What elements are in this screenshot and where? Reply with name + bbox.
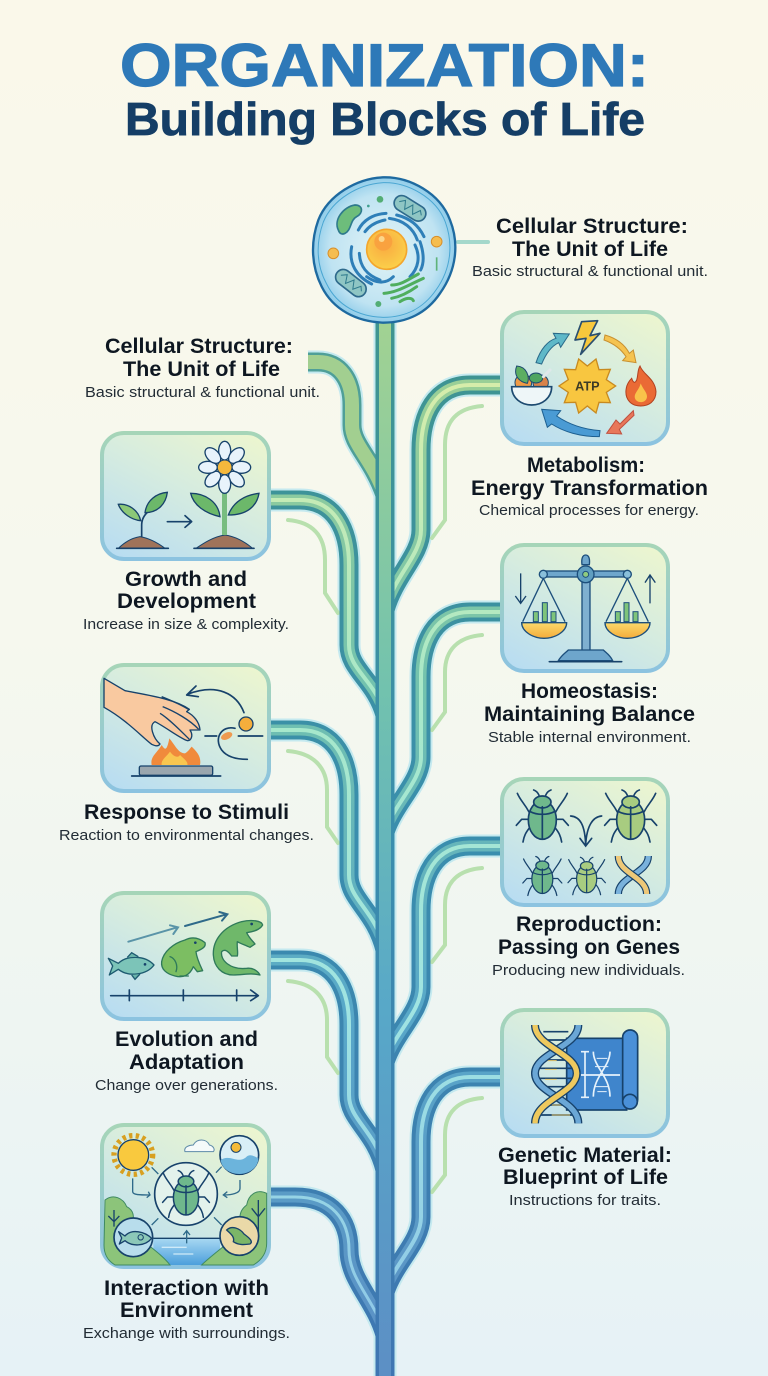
heading: Metabolism: [527, 454, 645, 477]
heading [104, 1277, 269, 1322]
panel: metabolism [471, 312, 708, 519]
panel: cellular structure label (right): Basic structural & functional unit. [472, 264, 708, 280]
heading: Adaptation [129, 1051, 244, 1074]
description: Chemical processes for energy. [479, 503, 699, 519]
icon: energy cycle with ATP: ATP [575, 380, 600, 394]
branch: reproduction [385, 846, 503, 1062]
heading: Evolution and [115, 1028, 258, 1051]
icon: DNA and blueprint [535, 1025, 638, 1123]
connector: cell to label [458, 240, 488, 244]
heading: Development [117, 590, 256, 613]
icon: hand near flame [104, 678, 263, 776]
branch: genetic material [385, 1077, 503, 1292]
heading: Growth and [125, 568, 247, 591]
panel: cellular structure label (left): Cellular Structure: [105, 335, 293, 358]
thin side shoots [288, 406, 482, 1192]
icon: cell [313, 177, 455, 323]
panel: genetic material [498, 1010, 672, 1209]
heading [498, 1144, 672, 1189]
description: Reaction to environmental changes. [59, 828, 314, 844]
icon: balance scale [515, 555, 655, 662]
heading: Blueprint of Life [503, 1166, 668, 1189]
panel: response to stimuli [59, 665, 314, 844]
heading: Maintaining Balance [484, 703, 695, 726]
heading [117, 568, 256, 613]
heading [115, 1028, 258, 1074]
panel: interaction with environment [83, 1125, 290, 1342]
heading [484, 680, 695, 726]
branch: evolution [268, 960, 385, 1170]
panel: cellular structure label (right): The Unit of Life [512, 238, 668, 261]
description: Increase in size & complexity. [83, 617, 289, 633]
branch: homeostasis [385, 612, 503, 832]
panel: growth and development [83, 433, 289, 633]
description: Stable internal environment. [488, 730, 691, 746]
icon: energy cycle with ATP [512, 321, 656, 437]
panel: cellular structure label (right) [472, 215, 708, 280]
description: Exchange with surroundings. [83, 1326, 290, 1342]
title [120, 32, 649, 145]
title: ORGANIZATION: [120, 32, 649, 99]
heading: Environment [120, 1299, 253, 1322]
heading: Homeostasis: [521, 680, 658, 703]
panel: cellular structure label (left): The Unit of Life [123, 358, 280, 381]
heading: Genetic Material: [498, 1144, 672, 1167]
icon: ecosystem [104, 1136, 267, 1265]
panel: cellular structure label (right): Cellular Structure: [496, 215, 688, 238]
tree outer glow [268, 318, 503, 1376]
description: Change over generations. [95, 1078, 278, 1094]
panel: evolution and adaptation [95, 893, 278, 1094]
branch: metabolism [385, 385, 503, 610]
icon: seedling to flower [117, 441, 259, 548]
branch: growth [268, 500, 385, 715]
heading: Energy Transformation [471, 477, 708, 500]
icon: fish to frog to lizard [108, 912, 263, 1001]
heading: Reproduction: [516, 913, 662, 936]
branch: first cellular structure label [308, 362, 385, 495]
heading: Interaction with [104, 1277, 269, 1300]
panel: cellular structure label (left) [85, 335, 320, 401]
icon: beetles and DNA [516, 790, 657, 895]
heading: Passing on Genes [498, 936, 680, 959]
panel: cellular structure label (left): Basic structural & functional unit. [85, 385, 320, 401]
panel: reproduction [492, 779, 685, 979]
branch: response [268, 730, 385, 950]
heading [471, 454, 708, 500]
panel: homeostasis [484, 545, 695, 746]
description: Instructions for traits. [509, 1193, 661, 1209]
heading: Response to Stimuli [84, 801, 289, 824]
trunk [384, 318, 386, 1376]
title: Building Blocks of Life [125, 93, 645, 145]
heading [498, 913, 680, 959]
description: Producing new individuals. [492, 963, 685, 979]
branch: interaction [268, 1197, 385, 1335]
